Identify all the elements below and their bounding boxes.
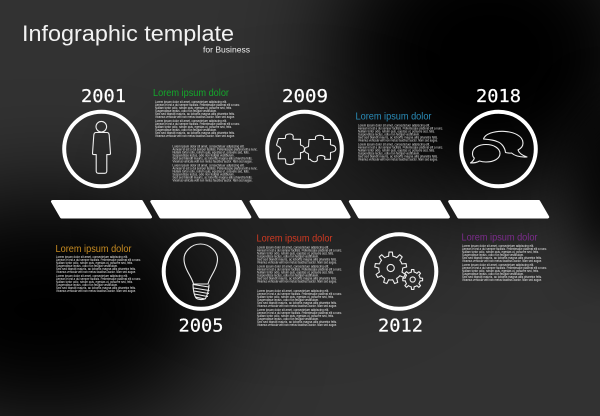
- icon: person: [92, 121, 110, 173]
- text block: green 1: Sed sed blandit mauris, ac lobortis magna aliis pharetra felis.: [155, 112, 235, 116]
- text block: green 2: Suspendisse lectus, odio non feugiat vestibulum.: [172, 172, 235, 176]
- milestone 2001: [64, 86, 139, 186]
- year 2012: 2012: [378, 316, 423, 336]
- text block: orange: Vivamus vehicula velit non metus faucibus auctor. Nam sed augue.: [56, 289, 136, 293]
- text block: blue: Aenean et est a dui semper facilisis. Pellentesque placerat elit a nunc.: [358, 126, 443, 130]
- text block: purple: Nullam tortor odio, rutrum quis, egestas ut, posuere sed, felis.: [462, 269, 539, 273]
- text block: red 1: Suspendisse lectus, odio non feugiat vestibulum.: [257, 274, 319, 278]
- text block: red 1: Aenean et est a dui semper facilisis. Pellentesque placerat elit a nunc.: [257, 248, 342, 252]
- text block: purple: Suspendisse lectus, odio non feugiat vestibulum.: [462, 253, 524, 257]
- text block: green 1: Lorem ipsum dolor sit amet, consectetuer adipiscing elit.: [155, 100, 227, 104]
- text block: orange: Sed sed blandit mauris, ac lobortis magna aliis pharetra felis.: [56, 267, 136, 271]
- text block: orange: Aenean et est a dui semper facilisis. Pellentesque placerat elit a nunc.: [56, 277, 141, 281]
- heading: orange: Lorem ipsum dolor: [56, 244, 132, 255]
- text block: green 1: Aenean et est a dui semper facilisis. Pellentesque placerat elit a nunc.: [155, 122, 240, 126]
- text block: blue: Aenean et est a dui semper facilisis. Pellentesque placerat elit a nunc.: [358, 146, 443, 150]
- text block: red 2: Vivamus vehicula velit non metus faucibus auctor. Nam sed augue.: [257, 304, 337, 308]
- ring: [267, 112, 342, 186]
- text block: green 2: Vivamus vehicula velit non metus faucibus auctor. Nam sed augue.: [172, 160, 253, 164]
- text block: blue: Vivamus vehicula velit non metus faucibus auctor. Nam sed augue.: [358, 138, 438, 142]
- ring: [64, 112, 139, 186]
- icon: light bulb: [184, 244, 218, 300]
- text block: blue: Vivamus vehicula velit non metus faucibus auctor. Nam sed augue.: [358, 158, 438, 162]
- text block: red 1: Sed sed blandit mauris, ac lobortis magna aliis pharetra felis.: [257, 276, 337, 280]
- text block: red 1: Lorem ipsum dolor sit amet, consectetuer adipiscing elit.: [257, 246, 329, 250]
- text block: green 1: Aenean et est a dui semper facilisis. Pellentesque placerat elit a nunc.: [155, 103, 240, 107]
- text block: green 1: Suspendisse lectus, odio non feugiat vestibulum.: [155, 128, 217, 132]
- ring: [461, 112, 536, 186]
- text block: green 2: Sed sed blandit mauris, ac lobortis magna aliis pharetra felis.: [172, 176, 253, 180]
- text block: green 2: Sed sed blandit mauris, ac lobortis magna aliis pharetra felis.: [172, 156, 253, 160]
- text block: green 2: Lorem ipsum dolor sit amet, consectetuer adipiscing elit.: [172, 144, 245, 148]
- text block: orange: Suspendisse lectus, odio non feugiat vestibulum.: [56, 283, 118, 287]
- milestone 2005: [164, 234, 238, 336]
- text block: orange: Nullam tortor odio, rutrum quis, egestas ut, posuere sed, felis.: [56, 261, 133, 265]
- icon: puzzle pieces: [276, 134, 336, 165]
- text block: red 1: Vivamus vehicula velit non metus faucibus auctor. Nam sed augue.: [257, 260, 337, 264]
- text block: purple: Nullam tortor odio, rutrum quis, egestas ut, posuere sed, felis.: [462, 250, 539, 254]
- year 2018: 2018: [476, 86, 521, 107]
- text block: red 1: Vivamus vehicula velit non metus faucibus auctor. Nam sed augue.: [257, 280, 337, 284]
- ring: [362, 234, 436, 309]
- text block: green 1: [155, 100, 240, 138]
- milestone 2018: [461, 86, 536, 186]
- text block: orange: Suspendisse lectus, odio non feugiat vestibulum.: [56, 264, 118, 268]
- year 2005: 2005: [178, 316, 224, 336]
- text block: green 2: Vivamus vehicula velit non metus faucibus auctor. Nam sed augue.: [172, 178, 253, 182]
- text block: purple: Lorem ipsum dolor sit amet, consectetuer adipiscing elit.: [462, 263, 534, 267]
- text block: green 2: Nullam tortor odio, rutrum quis, egestas ut, posuere sed, felis.: [172, 170, 250, 174]
- text block: red 2: Lorem ipsum dolor sit amet, consectetuer adipiscing elit.: [257, 289, 329, 293]
- text block: green 2: [172, 144, 258, 182]
- text block: blue: Lorem ipsum dolor sit amet, consectetuer adipiscing elit.: [358, 142, 430, 146]
- text block: red 1: Nullam tortor odio, rutrum quis, egestas ut, posuere sed, felis.: [257, 252, 334, 256]
- text block: blue: Sed sed blandit mauris, ac lobortis magna aliis pharetra felis.: [358, 154, 438, 158]
- text block: green 1: Nullam tortor odio, rutrum quis, egestas ut, posuere sed, felis.: [155, 125, 232, 129]
- text block: purple: [462, 244, 547, 282]
- text block: red 1: Sed sed blandit mauris, ac lobortis magna aliis pharetra felis.: [257, 258, 337, 262]
- text block: purple: Sed sed blandit mauris, ac lobortis magna aliis pharetra felis.: [462, 256, 542, 260]
- text block: green 1: Nullam tortor odio, rutrum quis, egestas ut, posuere sed, felis.: [155, 106, 232, 110]
- text block: red 1: Nullam tortor odio, rutrum quis, egestas ut, posuere sed, felis.: [257, 270, 334, 274]
- timeline bars: [52, 202, 548, 217]
- title: Infographic template: [22, 21, 234, 46]
- title: [22, 21, 250, 54]
- heading: red: Lorem ipsum dolor: [256, 234, 333, 244]
- text block: red 2: Nullam tortor odio, rutrum quis, egestas ut, posuere sed, felis.: [257, 314, 334, 318]
- text block: red 2: Lorem ipsum dolor sit amet, consectetuer adipiscing elit.: [257, 308, 329, 312]
- text block: orange: [56, 255, 141, 293]
- text block: green 2: Aenean et est a dui semper facilisis. Pellentesque placerat elit a nunc.: [172, 148, 258, 152]
- text block: red 2: [257, 289, 342, 327]
- text block: blue: Nullam tortor odio, rutrum quis, egestas ut, posuere sed, felis.: [358, 130, 435, 134]
- text block: red 1: [257, 246, 342, 284]
- year 2009: 2009: [282, 86, 328, 107]
- text block: red 2: Sed sed blandit mauris, ac lobortis magna aliis pharetra felis.: [257, 301, 337, 305]
- text block: green 2: Aenean et est a dui semper facilisis. Pellentesque placerat elit a nunc.: [172, 166, 258, 170]
- text block: blue: Lorem ipsum dolor sit amet, consectetuer adipiscing elit.: [358, 124, 430, 128]
- heading: blue: Lorem ipsum dolor: [356, 112, 432, 122]
- text block: orange: Aenean et est a dui semper facilisis. Pellentesque placerat elit a nunc.: [56, 258, 141, 262]
- text block: green 1: Suspendisse lectus, odio non feugiat vestibulum.: [155, 109, 217, 113]
- text block: orange: Lorem ipsum dolor sit amet, consectetuer adipiscing elit.: [56, 274, 128, 278]
- text block: red 1: Aenean et est a dui semper facilisis. Pellentesque placerat elit a nunc.: [257, 268, 342, 272]
- text block: purple: Sed sed blandit mauris, ac lobortis magna aliis pharetra felis.: [462, 275, 542, 279]
- text block: blue: Suspendisse lectus, odio non feugiat vestibulum.: [358, 152, 420, 156]
- text block: red 1: Lorem ipsum dolor sit amet, consectetuer adipiscing elit.: [257, 264, 329, 268]
- text block: red 2: Suspendisse lectus, odio non feugiat vestibulum.: [257, 317, 319, 321]
- text block: green 1: Lorem ipsum dolor sit amet, consectetuer adipiscing elit.: [155, 119, 227, 123]
- text block: blue: Suspendisse lectus, odio non feugiat vestibulum.: [358, 132, 420, 136]
- milestone 2012: [362, 234, 436, 336]
- text block: red 2: Vivamus vehicula velit non metus faucibus auctor. Nam sed augue.: [257, 323, 337, 327]
- text block: red 2: Aenean et est a dui semper facilisis. Pellentesque placerat elit a nunc.: [257, 292, 342, 296]
- text block: red 1: Suspendisse lectus, odio non feugiat vestibulum.: [257, 254, 319, 258]
- heading: green: Lorem ipsum dolor: [153, 88, 229, 99]
- text block: green 1: Vivamus vehicula velit non metus faucibus auctor. Nam sed augue.: [155, 115, 235, 119]
- text block: purple: Aenean et est a dui semper facilisis. Pellentesque placerat elit a nunc.: [462, 247, 547, 251]
- text block: purple: Vivamus vehicula velit non metus faucibus auctor. Nam sed augue.: [462, 278, 542, 282]
- heading: purple: Lorem ipsum dolor: [462, 232, 538, 244]
- text block: blue: Sed sed blandit mauris, ac lobortis magna aliis pharetra felis.: [358, 136, 438, 140]
- text block: green 2: Nullam tortor odio, rutrum quis, egestas ut, posuere sed, felis.: [172, 150, 250, 154]
- text block: red 2: Sed sed blandit mauris, ac lobortis magna aliis pharetra felis.: [257, 320, 337, 324]
- text block: orange: Vivamus vehicula velit non metus faucibus auctor. Nam sed augue.: [56, 270, 136, 274]
- text block: red 2: Nullam tortor odio, rutrum quis, egestas ut, posuere sed, felis.: [257, 295, 334, 299]
- milestone 2009: [267, 86, 342, 186]
- text block: green 1: Vivamus vehicula velit non metus faucibus auctor. Nam sed augue.: [155, 134, 235, 138]
- subtitle: for Business: [203, 44, 250, 54]
- year 2001: 2001: [81, 86, 126, 107]
- text block: red 2: Aenean et est a dui semper facilisis. Pellentesque placerat elit a nunc.: [257, 311, 342, 315]
- text block: purple: Aenean et est a dui semper facilisis. Pellentesque placerat elit a nunc.: [462, 266, 547, 270]
- text block: blue: Nullam tortor odio, rutrum quis, egestas ut, posuere sed, felis.: [358, 148, 435, 152]
- text block: green 2: Suspendisse lectus, odio non feugiat vestibulum.: [172, 154, 235, 158]
- text block: orange: Nullam tortor odio, rutrum quis, egestas ut, posuere sed, felis.: [56, 280, 133, 284]
- icon: speech bubbles: [470, 131, 527, 163]
- text block: green 1: Sed sed blandit mauris, ac lobortis magna aliis pharetra felis.: [155, 131, 235, 135]
- text block: purple: Lorem ipsum dolor sit amet, consectetuer adipiscing elit.: [462, 244, 534, 248]
- text block: orange: Lorem ipsum dolor sit amet, consectetuer adipiscing elit.: [56, 255, 128, 259]
- text block: purple: Suspendisse lectus, odio non feugiat vestibulum.: [462, 272, 524, 276]
- text block: purple: Vivamus vehicula velit non metus faucibus auctor. Nam sed augue.: [462, 259, 542, 263]
- text block: green 2: Lorem ipsum dolor sit amet, consectetuer adipiscing elit.: [172, 164, 245, 168]
- text block: red 2: Suspendisse lectus, odio non feugiat vestibulum.: [257, 298, 319, 302]
- icon: gears: [374, 252, 423, 289]
- text block: orange: Sed sed blandit mauris, ac lobortis magna aliis pharetra felis.: [56, 286, 136, 290]
- ring: [164, 234, 238, 309]
- text block: blue: [358, 124, 443, 162]
